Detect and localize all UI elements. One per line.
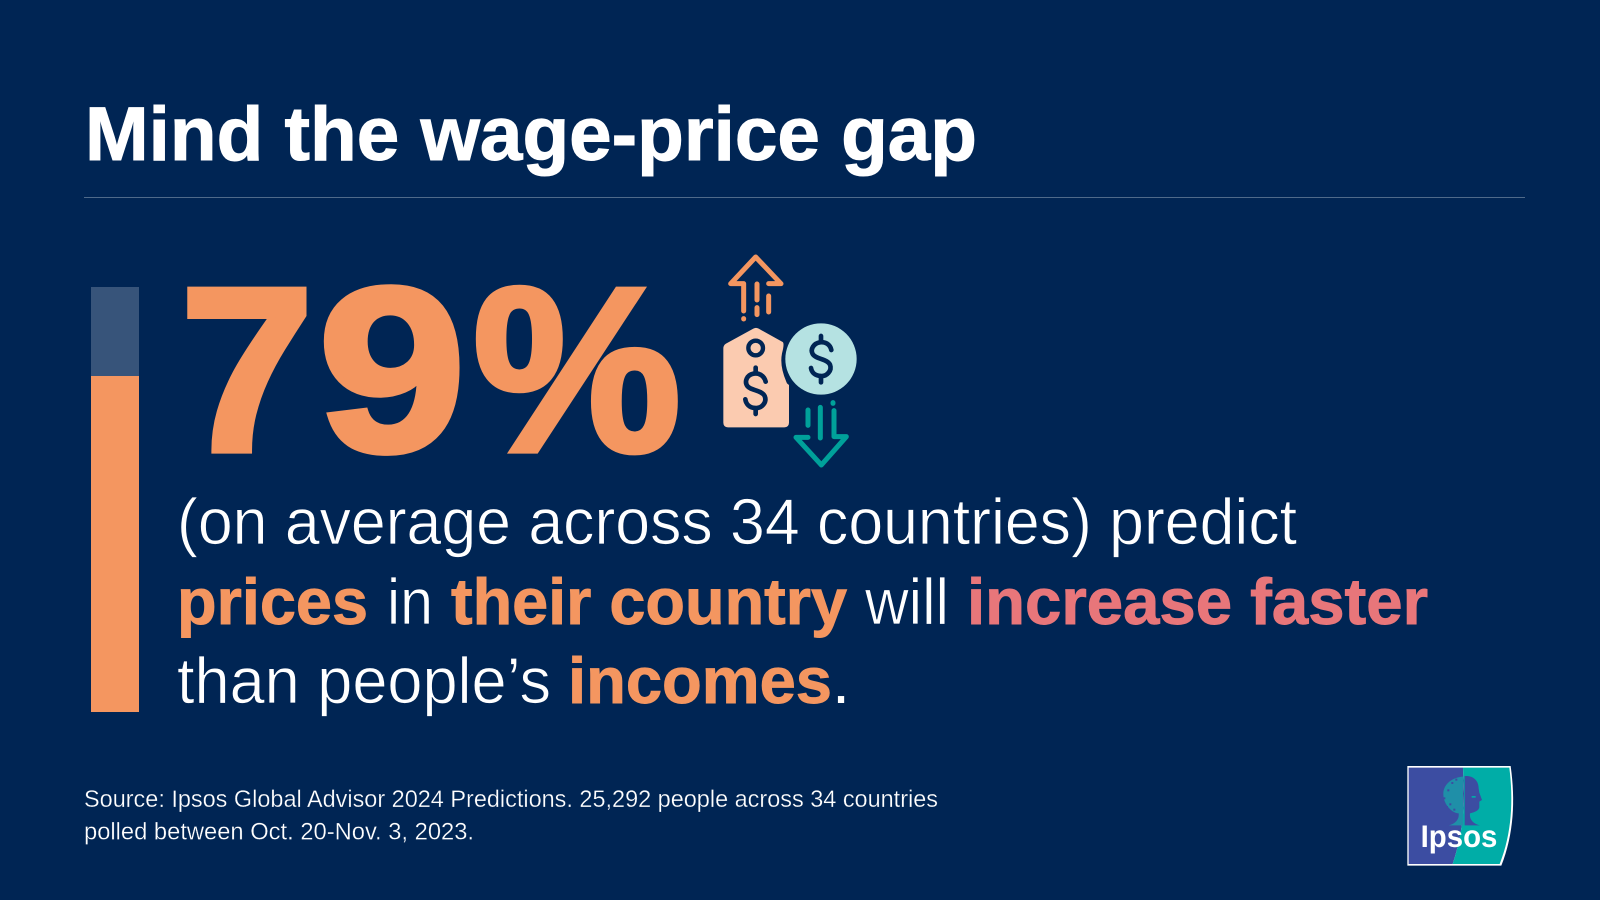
icon: price tag	[723, 328, 789, 427]
text line 2: will	[864, 565, 949, 638]
icon: dollar sign on tag	[745, 368, 766, 414]
title: Mind the wage-price gap	[85, 92, 977, 177]
big statistic: 79%: 9	[318, 239, 466, 501]
source note: Source: Ipsos Global Advisor 2024 Predictions. 25,292 people across 34 countries	[84, 786, 938, 813]
text line 2: prices	[177, 565, 368, 638]
icon: price tag and coin with up and down arrows	[723, 257, 857, 465]
icon: up arrow	[731, 257, 781, 319]
text line 2: increase faster	[967, 565, 1428, 638]
big statistic: 79%: %	[473, 239, 681, 501]
logo: Ipsos	[1407, 766, 1513, 866]
text line 2: their country	[451, 565, 847, 638]
icon: dollar sign on coin	[811, 336, 831, 382]
text line 2	[177, 565, 1428, 638]
icon: coin	[785, 323, 857, 395]
big statistic: 79%: 7	[180, 239, 314, 501]
body text	[177, 485, 1428, 717]
text line 3: incomes	[568, 644, 832, 717]
text line 2: in	[387, 565, 433, 638]
source note: polled between Oct. 20-Nov. 3, 2023.	[84, 818, 474, 846]
text line 1: (on average across 34 countries) predict	[177, 485, 1297, 558]
logo: wordmark: Ipsos	[1421, 819, 1497, 854]
text line 3: .	[832, 644, 850, 717]
text line 3	[177, 644, 850, 717]
logo: head silhouette	[1443, 776, 1482, 825]
icon: down arrow	[796, 403, 846, 465]
source note	[84, 786, 938, 846]
big statistic: 79%	[180, 239, 681, 501]
text line 3: than people’s	[177, 644, 551, 717]
bar chart: 79 percent progress bar	[91, 287, 139, 712]
